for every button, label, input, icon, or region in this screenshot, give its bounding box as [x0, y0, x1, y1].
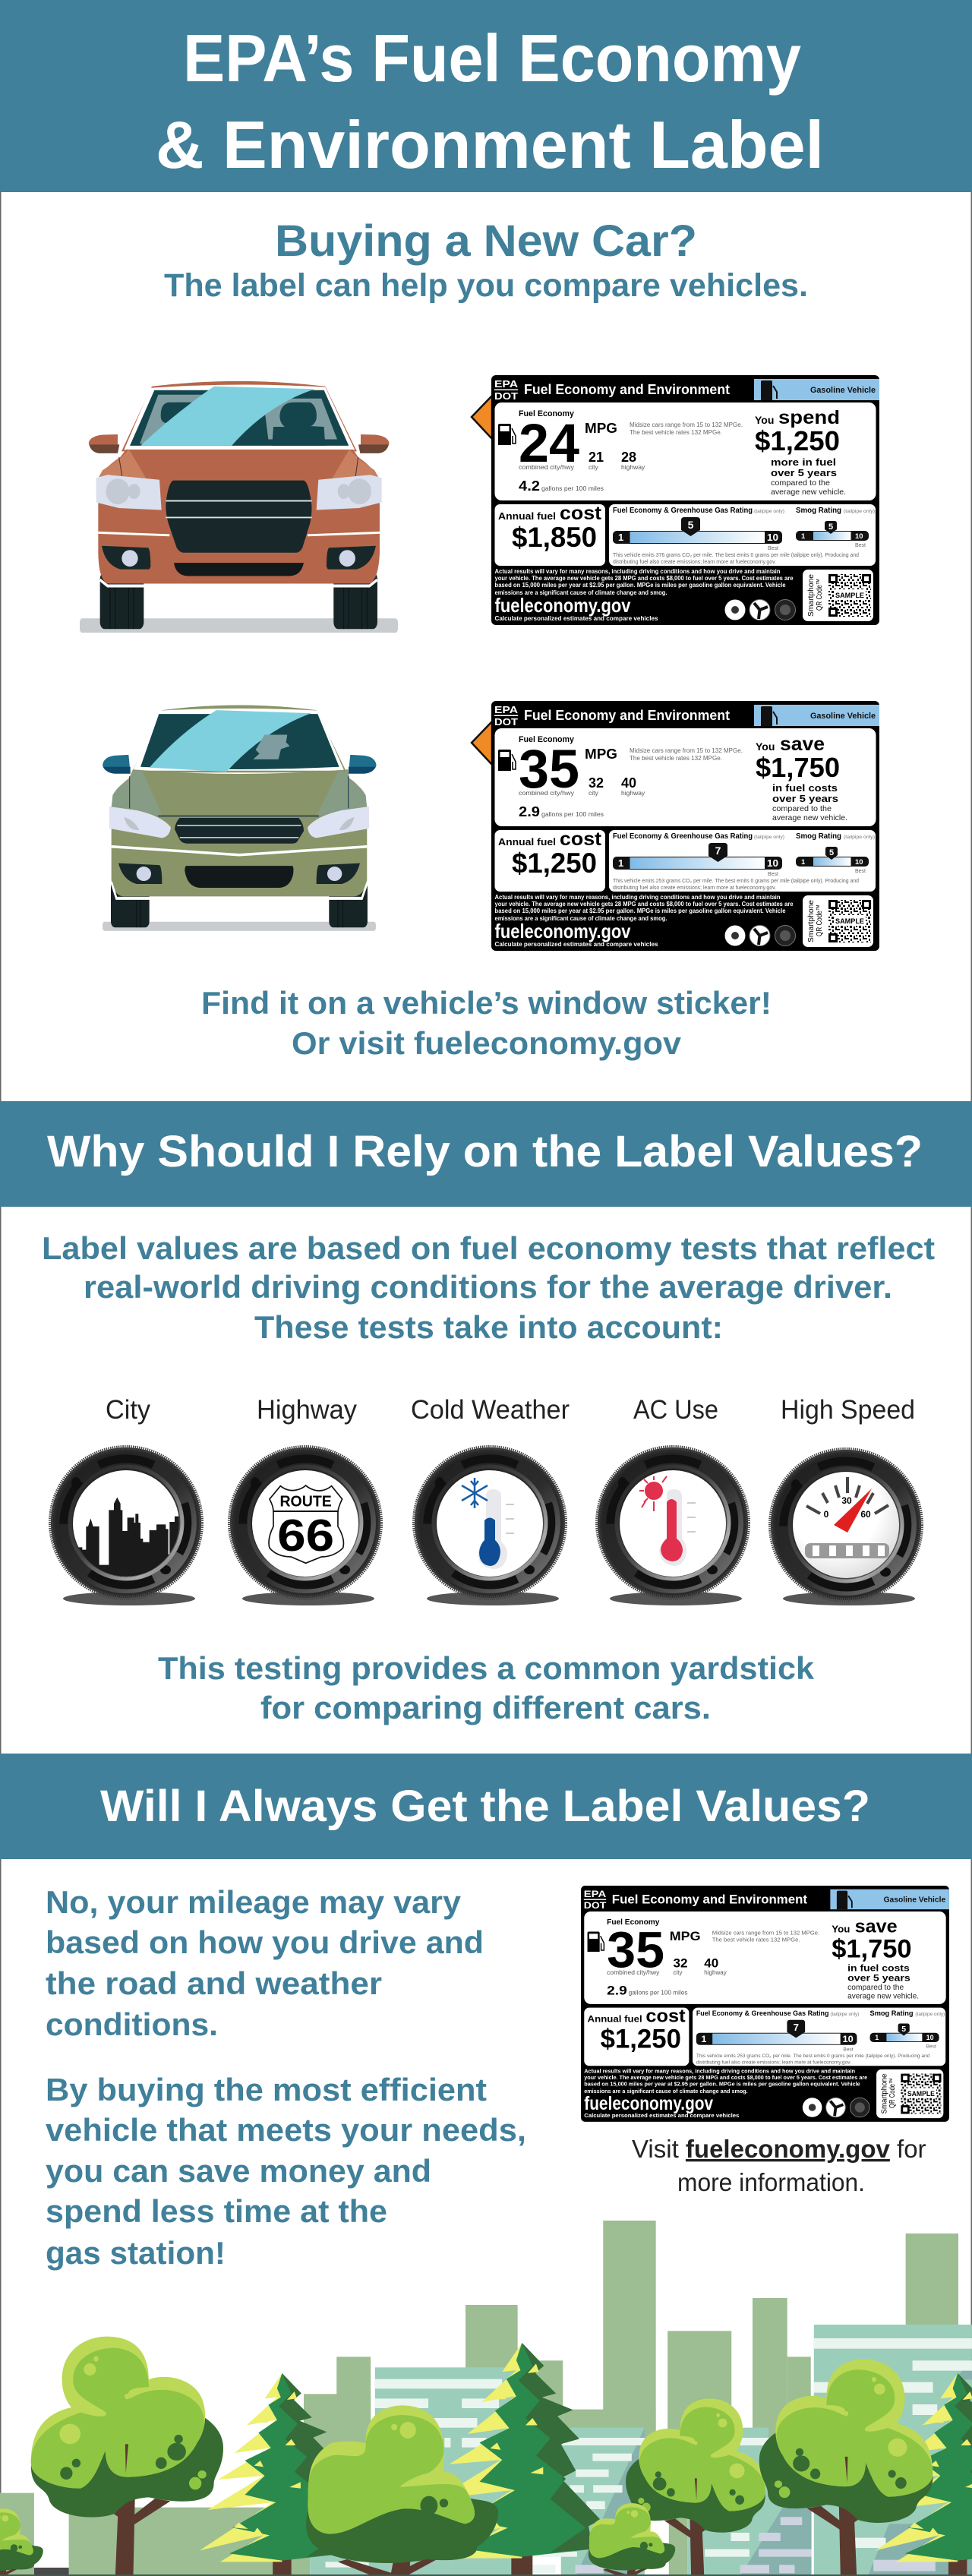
- label: 35 MPG fuel economy sticker: Annual fuel: [498, 836, 556, 848]
- label: 35 MPG fuel economy sticker: Best: [768, 872, 778, 877]
- label: 24 MPG fuel economy sticker: Fuel Economy and Environment: [524, 382, 730, 397]
- label: 24 MPG fuel economy sticker: Fuel Economy: [519, 409, 575, 418]
- label: 35 MPG fuel economy sticker: (tailpipe only): [754, 835, 784, 840]
- label: 35 MPG fuel economy sticker: MPG: [585, 747, 617, 762]
- label: 35 MPG sticker, small: The best vehicle rates 132 MPGe.: [712, 1937, 800, 1943]
- text: buying efficient vehicle: you can save money and: [46, 2153, 431, 2189]
- label: 35 MPG fuel economy sticker: Fuel Economy: [519, 735, 575, 744]
- label: 35 MPG fuel economy sticker: compared to the: [772, 804, 832, 813]
- label: 24 MPG fuel economy sticker: highway: [621, 463, 645, 471]
- label: 35 MPG sticker, small: Smartphone: [880, 2073, 888, 2114]
- label: 35 MPG fuel economy sticker: based on 15,000 miles per year at $2.95 per gallon. MPGe is miles per gasoline gallon equivalent. Vehicle: [495, 908, 786, 914]
- label: 35 MPG sticker, small: EPA: [584, 1889, 607, 1899]
- label: 35 MPG sticker, small: QR Code™: [888, 2078, 897, 2108]
- label: 35 MPG sticker, small: based on 15,000 miles per year at $2.95 per gallon. MPGe is miles per gasoline gallon equivalent. Vehicle: [584, 2081, 860, 2088]
- text: visit fueleconomy.gov: more information.: [677, 2168, 865, 2196]
- text: visit fueleconomy.gov: Visit fueleconomy.gov for: [632, 2135, 926, 2163]
- label: 24 MPG fuel economy sticker: fueleconomy.gov: [495, 594, 631, 617]
- label: 35 MPG sticker, small: Actual results will vary for many reasons, including driving conditions and how you drive and maintain: [584, 2068, 855, 2075]
- label: 24 MPG fuel economy sticker: compared to the: [771, 478, 830, 488]
- label: 35 MPG sticker, small: 2.9: [607, 1984, 627, 1998]
- label: 35 MPG fuel economy sticker: [472, 701, 879, 951]
- item: highway: Highway: [257, 1395, 357, 1425]
- text: buying efficient vehicle: spend less time at the: [46, 2193, 387, 2229]
- label: 24 MPG fuel economy sticker: Midsize cars range from 15 to 132 MPGe.: [630, 421, 743, 428]
- label: 35 MPG fuel economy sticker: QR Code™: [815, 904, 824, 936]
- label: 24 MPG fuel economy sticker: 10: [767, 532, 778, 543]
- label: 35 MPG sticker, small: [581, 1886, 949, 2122]
- label: 35 MPG fuel economy sticker: Fuel Economy and Environment: [524, 708, 730, 723]
- label: 24 MPG fuel economy sticker: The best vehicle rates 132 MPGe.: [630, 429, 722, 436]
- label: 35 MPG fuel economy sticker: 1: [618, 857, 623, 869]
- label: 35 MPG fuel economy sticker: Calculate personalized estimates and compare vehicles: [495, 941, 658, 948]
- text: mileage may vary: based on how you drive and: [46, 1924, 484, 1960]
- label: 35 MPG sticker, small: This vehicle emits 253 grams CO₂ per mile. The best emits 0 grams per mile (tailpipe only). Producing and: [696, 2054, 930, 2059]
- label: 35 MPG sticker, small: Annual fuel: [588, 2014, 642, 2025]
- text: mileage may vary: No, your mileage may vary: [46, 1884, 462, 1920]
- title: & Environment Label: [156, 107, 824, 182]
- label: 35 MPG sticker, small: compared to the: [847, 1984, 904, 1992]
- label: 35 MPG sticker, small: 10: [926, 2034, 934, 2041]
- title banner: [0, 0, 972, 192]
- label: 35 MPG fuel economy sticker: Gasoline Vehicle: [810, 712, 876, 721]
- item: AC use: AC Use: [633, 1395, 718, 1425]
- section heading: Why Should I Rely on the Label Values?: [47, 1127, 923, 1176]
- skyline buildings: [0, 2221, 972, 2576]
- label: 35 MPG fuel economy sticker: cost: [560, 829, 602, 850]
- label: 24 MPG fuel economy sticker: spend: [778, 407, 840, 428]
- label: 35 MPG fuel economy sticker: highway: [621, 789, 645, 797]
- label: 24 MPG fuel economy sticker: $1,250: [755, 425, 840, 456]
- label: 24 MPG fuel economy sticker: distributing fuel also create emissions; learn more at fueleconomy.gov.: [613, 560, 776, 565]
- label: 35 MPG fuel economy sticker: (tailpipe only): [844, 835, 875, 840]
- label: 35 MPG sticker, small: gallons per 100 miles: [629, 1990, 687, 1997]
- section banner: always get label values: [0, 1754, 972, 1859]
- label: 35 MPG sticker, small: Best: [926, 2044, 936, 2050]
- label: 24 MPG fuel economy sticker: Best: [855, 543, 866, 548]
- text: common yardstick: for comparing different cars.: [260, 1690, 711, 1725]
- label: 35 MPG fuel economy sticker: gallons per 100 miles: [541, 810, 604, 818]
- label: 35 MPG fuel economy sticker: emissions are a significant cause of climate change and smog.: [495, 915, 667, 922]
- label: 35 MPG sticker, small: DOT: [584, 1900, 607, 1911]
- text: buying efficient vehicle: gas station!: [46, 2235, 226, 2271]
- illustration: orange car: [80, 381, 398, 633]
- label: 35 MPG fuel economy sticker: Fuel Economy & Greenhouse Gas Rating: [613, 832, 753, 841]
- label: 35 MPG sticker, small: 1: [875, 2034, 879, 2041]
- item: highway: ROUTE: [279, 1494, 332, 1511]
- label: 35 MPG fuel economy sticker: This vehicle emits 253 grams CO₂ per mile. The best emits 0 grams per mile (tailpipe only). Producing and: [613, 879, 859, 884]
- label: 24 MPG fuel economy sticker: 21: [589, 450, 604, 465]
- label: 24 MPG fuel economy sticker: Actual results will vary for many reasons, including driving conditions and how you drive and maintain: [495, 568, 781, 575]
- text: visit fueleconomy.gov: [632, 2135, 926, 2196]
- label: 35 MPG fuel economy sticker: city: [589, 789, 598, 797]
- label: 35 MPG sticker, small: MPG: [670, 1929, 701, 1943]
- label: 35 MPG sticker, small: Fuel Economy and Environment: [612, 1893, 807, 1907]
- label: 35 MPG sticker, small: Midsize cars range from 15 to 132 MPGe.: [712, 1929, 819, 1936]
- item: high speed: 60: [860, 1509, 871, 1520]
- text: label values explanation: real-world driving conditions for the average driver.: [84, 1269, 892, 1305]
- label: 35 MPG sticker, small: SAMPLE: [907, 2090, 935, 2098]
- text: label values explanation: These tests take into account:: [254, 1309, 723, 1345]
- label: 35 MPG sticker, small: Best: [843, 2047, 854, 2052]
- label: 35 MPG sticker, small: Fuel Economy: [607, 1918, 660, 1927]
- illustration: city skyline with trees: [0, 2221, 972, 2576]
- label: 35 MPG fuel economy sticker: $1,750: [756, 752, 840, 783]
- label: 24 MPG fuel economy sticker: 1: [801, 532, 806, 541]
- orange arrow: [472, 396, 492, 439]
- text: where to find the label: Or visit fueleconomy.gov: [292, 1025, 682, 1061]
- label: 24 MPG fuel economy sticker: $1,850: [512, 522, 597, 553]
- label: 35 MPG fuel economy sticker: Actual results will vary for many reasons, including driving conditions and how you drive and maintain: [495, 894, 781, 901]
- label: 35 MPG sticker, small: You: [832, 1923, 850, 1934]
- label: 35 MPG sticker, small: distributing fuel also create emissions; learn more at fueleconomy.gov.: [696, 2060, 851, 2065]
- heading: buying a new car: Buying a New Car?: [275, 216, 697, 266]
- label: 35 MPG fuel economy sticker: DOT: [494, 717, 518, 728]
- label: 35 MPG fuel economy sticker: 1: [801, 858, 806, 867]
- label: 35 MPG sticker, small: 32: [673, 1956, 687, 1971]
- test conditions row: [51, 1395, 921, 1605]
- label: 24 MPG fuel economy sticker: more in fuel: [771, 456, 836, 468]
- label: 24 MPG fuel economy sticker: EPA: [494, 379, 518, 390]
- label: 35 MPG fuel economy sticker: The best vehicle rates 132 MPGe.: [630, 755, 722, 762]
- illustration: green car: [103, 705, 377, 931]
- label: 35 MPG fuel economy sticker: 2.9: [519, 804, 540, 819]
- label: 24 MPG fuel economy sticker: Calculate personalized estimates and compare vehicles: [495, 615, 658, 622]
- label: 35 MPG sticker, small: in fuel costs: [847, 1962, 910, 1973]
- label: 35 MPG sticker, small: cost: [645, 2007, 686, 2027]
- label: 24 MPG fuel economy sticker: city: [589, 463, 598, 471]
- label: 24 MPG fuel economy sticker: cost: [560, 503, 602, 524]
- label: 35 MPG sticker, small: your vehicle. The average new vehicle gets 28 MPG and costs $8,000 to fuel over 5 years. Cost estimates are: [584, 2074, 867, 2081]
- item: highway: 66: [277, 1510, 334, 1561]
- label: 35 MPG sticker, small: 7: [794, 2022, 799, 2033]
- label: 24 MPG fuel economy sticker: 10: [855, 532, 863, 541]
- label: 35 MPG fuel economy sticker: Best: [855, 869, 866, 874]
- label: 24 MPG fuel economy sticker: gallons per 100 miles: [541, 485, 604, 492]
- label: 24 MPG fuel economy sticker: SAMPLE: [835, 592, 864, 600]
- label: 24 MPG fuel economy sticker: 28: [621, 450, 636, 465]
- item: high speed: [771, 1395, 921, 1605]
- label: 35 MPG fuel economy sticker: 5: [829, 848, 834, 857]
- label: 24 MPG fuel economy sticker: (tailpipe only): [754, 509, 784, 514]
- label: 35 MPG fuel economy sticker: your vehicle. The average new vehicle gets 28 MPG and costs $8,000 to fuel over 5 years. Cost estimates are: [495, 901, 794, 908]
- label: 35 MPG fuel economy sticker: 40: [621, 775, 636, 791]
- label: 35 MPG fuel economy sticker: $1,250: [512, 848, 597, 879]
- label: 35 MPG fuel economy sticker: Midsize cars range from 15 to 132 MPGe.: [630, 747, 743, 754]
- label: 35 MPG fuel economy sticker: combined city/hwy: [519, 789, 575, 797]
- label: 24 MPG fuel economy sticker: 4.2: [519, 478, 540, 494]
- label: 24 MPG fuel economy sticker: Gasoline Vehicle: [810, 386, 876, 395]
- item: high speed: 0: [824, 1509, 829, 1520]
- label: 24 MPG fuel economy sticker: based on 15,000 miles per year at $2.95 per gallon. MPGe is miles per gasoline gallon equivalent. Vehicle: [495, 582, 786, 589]
- text: where to find the label: Find it on a vehicle’s window sticker!: [201, 985, 772, 1021]
- label: 24 MPG fuel economy sticker: combined city/hwy: [519, 463, 575, 471]
- subheading: The label can help you compare vehicles.: [164, 267, 808, 304]
- label: 35 MPG fuel economy sticker: distributing fuel also create emissions; learn more at fueleconomy.gov.: [613, 886, 776, 891]
- label: 35 MPG sticker, small: fueleconomy.gov: [584, 2094, 713, 2114]
- label: 35 MPG sticker, small: Calculate personalized estimates and compare vehicles: [584, 2112, 739, 2119]
- text: common yardstick: This testing provides a common yardstick: [158, 1650, 815, 1686]
- item: high speed: High Speed: [781, 1395, 915, 1425]
- label: 35 MPG sticker, small: 1: [701, 2034, 706, 2044]
- item: AC use: [598, 1395, 748, 1605]
- text: mileage may vary: conditions.: [46, 2006, 218, 2042]
- label: 24 MPG fuel economy sticker: (tailpipe only): [844, 509, 875, 514]
- label: 35 MPG sticker, small: emissions are a significant cause of climate change and smog.: [584, 2088, 748, 2095]
- label: 35 MPG sticker, small: 35: [607, 1922, 664, 1979]
- item: city: City: [106, 1395, 150, 1425]
- label: 24 MPG fuel economy sticker: QR Code™: [815, 579, 824, 611]
- text: buying efficient vehicle: By buying the most efficient: [46, 2072, 487, 2107]
- label: 24 MPG fuel economy sticker: Smartphone: [806, 574, 816, 617]
- label: 35 MPG fuel economy sticker: 32: [589, 775, 604, 791]
- label: 35 MPG fuel economy sticker: SAMPLE: [835, 917, 864, 926]
- label: 35 MPG fuel economy sticker: average new vehicle.: [772, 813, 847, 822]
- label: 35 MPG sticker, small: 40: [704, 1956, 718, 1971]
- label: 35 MPG sticker, small: $1,250: [601, 2025, 681, 2054]
- label: 24 MPG fuel economy sticker: emissions are a significant cause of climate change and smog.: [495, 589, 667, 596]
- section heading: Will I Always Get the Label Values?: [100, 1782, 870, 1831]
- label: 35 MPG sticker, small: Gasoline Vehicle: [884, 1896, 945, 1905]
- label: 24 MPG fuel economy sticker: 24: [519, 414, 580, 474]
- item: high speed: 30: [841, 1495, 852, 1506]
- label: 35 MPG sticker, small: (tailpipe only): [915, 2012, 945, 2017]
- label: 35 MPG fuel economy sticker: in fuel costs: [772, 782, 838, 794]
- label: 35 MPG sticker, small: average new vehicle.: [847, 1992, 919, 2000]
- label: 35 MPG sticker, small: Fuel Economy & Greenhouse Gas Rating: [696, 2009, 829, 2018]
- label: 35 MPG fuel economy sticker: EPA: [494, 705, 518, 715]
- label: 24 MPG fuel economy sticker: 5: [828, 522, 833, 532]
- label: 35 MPG sticker, small: city: [673, 1969, 683, 1976]
- item: highway: [230, 1395, 380, 1605]
- label: 24 MPG fuel economy sticker: your vehicle. The average new vehicle gets 28 MPG and costs $8,000 to fuel over 5 years. Cost estimates are: [495, 575, 794, 582]
- label: 24 MPG fuel economy sticker: 1: [618, 532, 623, 543]
- label: 24 MPG fuel economy sticker: Annual fuel: [498, 510, 556, 522]
- label: 24 MPG fuel economy sticker: DOT: [494, 391, 518, 402]
- label: 24 MPG fuel economy sticker: This vehicle emits 376 grams CO₂ per mile. The best emits 0 grams per mile (tailpipe only). Producing and: [613, 553, 859, 558]
- label: 24 MPG fuel economy sticker: Smog Rating: [796, 507, 841, 515]
- label: 35 MPG sticker, small: $1,750: [832, 1935, 912, 1963]
- label: 24 MPG fuel economy sticker: MPG: [585, 421, 617, 436]
- label: 24 MPG fuel economy sticker: [472, 375, 879, 625]
- label: 35 MPG sticker, small: over 5 years: [847, 1973, 910, 1984]
- label: 35 MPG sticker, small: 10: [842, 2034, 854, 2044]
- label: 35 MPG fuel economy sticker: over 5 years: [772, 793, 838, 804]
- label: 35 MPG fuel economy sticker: 7: [715, 844, 721, 857]
- label: 35 MPG sticker, small: highway: [704, 1969, 727, 1976]
- label: 35 MPG sticker, small: save: [855, 1917, 898, 1937]
- item: cold weather: Cold Weather: [411, 1395, 570, 1425]
- label: 35 MPG fuel economy sticker: Smog Rating: [796, 832, 841, 841]
- item: cold weather: [411, 1395, 570, 1605]
- deciduous trees: [0, 2337, 933, 2576]
- pine trees: [200, 2343, 972, 2576]
- label: 35 MPG sticker, small: 5: [901, 2025, 906, 2034]
- label: 35 MPG fuel economy sticker: 10: [855, 858, 863, 867]
- label: 35 MPG sticker, small: Smog Rating: [870, 2009, 914, 2018]
- label: 35 MPG fuel economy sticker: save: [780, 734, 825, 755]
- label: 35 MPG sticker, small: (tailpipe only): [830, 2012, 859, 2017]
- label: 24 MPG fuel economy sticker: You: [755, 414, 774, 426]
- label: 24 MPG fuel economy sticker: over 5 years: [771, 467, 837, 478]
- label: 35 MPG fuel economy sticker: You: [756, 740, 775, 753]
- label: 35 MPG fuel economy sticker: Smartphone: [806, 900, 816, 942]
- section banner: why rely on label values: [0, 1101, 972, 1207]
- text: label values explanation: Label values are based on fuel economy tests that reflect: [42, 1230, 935, 1266]
- orange arrow: [472, 721, 492, 765]
- label: 35 MPG fuel economy sticker: 35: [519, 740, 579, 800]
- label: 24 MPG fuel economy sticker: Best: [768, 546, 778, 551]
- label: 35 MPG fuel economy sticker: fueleconomy.gov: [495, 920, 631, 942]
- title: EPA’s Fuel Economy: [183, 21, 801, 96]
- label: 24 MPG fuel economy sticker: average new vehicle.: [771, 488, 846, 497]
- text: mileage may vary: the road and weather: [46, 1965, 382, 2001]
- label: 24 MPG fuel economy sticker: Fuel Economy & Greenhouse Gas Rating: [613, 507, 753, 515]
- label: 35 MPG sticker, small: combined city/hwy: [607, 1969, 659, 1976]
- label: 24 MPG fuel economy sticker: 5: [688, 519, 694, 531]
- item: city: [51, 1395, 201, 1605]
- label: 35 MPG fuel economy sticker: 10: [767, 857, 778, 869]
- text: buying efficient vehicle: vehicle that meets your needs,: [46, 2112, 526, 2148]
